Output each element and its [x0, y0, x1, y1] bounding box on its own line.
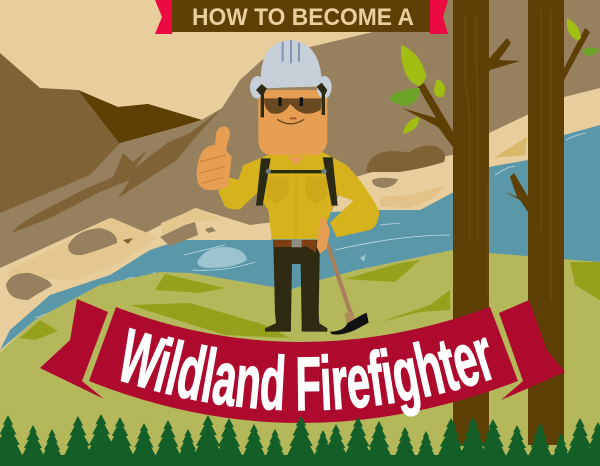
branches — [402, 28, 590, 212]
rocks — [6, 146, 445, 300]
treeline — [0, 414, 600, 466]
banner title — [114, 378, 494, 410]
leaves — [389, 18, 600, 134]
grass — [0, 250, 600, 466]
sand banks — [7, 137, 527, 280]
tree trunks — [453, 0, 564, 445]
river — [0, 125, 600, 350]
heading: HOW TO BECOME A — [192, 4, 414, 31]
text: Wildland Firefighter — [120, 328, 492, 416]
red ribbon band — [89, 307, 518, 423]
river pools and ripples — [35, 133, 586, 318]
firefighter character — [197, 40, 379, 335]
mountains — [0, 0, 600, 268]
header ribbon — [155, 0, 448, 34]
red ribbon tails — [40, 299, 565, 400]
